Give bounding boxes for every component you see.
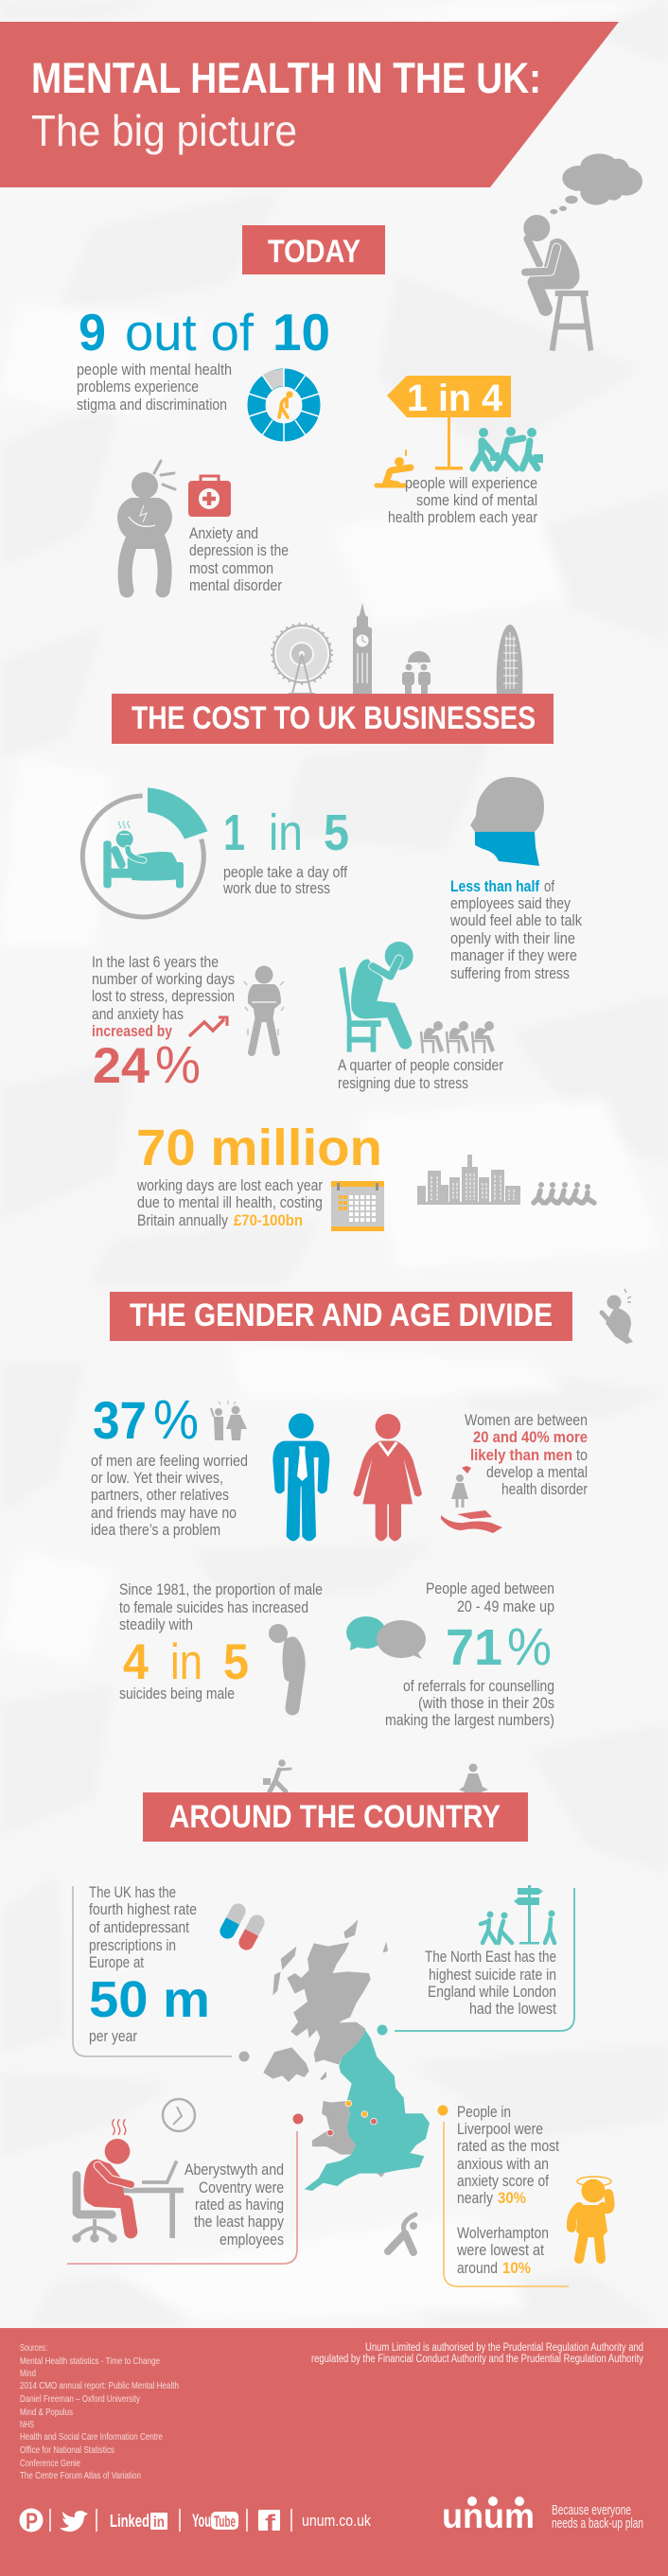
callout: least happy employees: the least happy [194, 2214, 285, 2231]
text: working days lost: and anxiety has [92, 1006, 184, 1023]
footer band [0, 2328, 668, 2576]
icon: linkedin: in [153, 2514, 165, 2531]
stat: 9 out of 10: 10 [272, 303, 330, 362]
map: england [305, 2030, 430, 2191]
stat: 1 in 5: 5 [324, 804, 349, 861]
icon: first aid kit [188, 476, 231, 517]
callout: antidepressants: The UK has the [89, 1884, 176, 1901]
callout: least happy employees: Coventry were [199, 2179, 284, 2197]
icon: facebook [258, 2510, 280, 2536]
heading: cost to uk businesses: THE COST TO UK BUSINESSES [132, 700, 536, 736]
text: less than half [449, 878, 583, 982]
heading: around the country [143, 1792, 528, 1842]
text: working days lost: lost to stress, depression [92, 988, 235, 1005]
callout: liverpool and wolverhampton [437, 2104, 569, 2286]
map: northern ireland and islands [263, 1919, 388, 2178]
callout: antidepressants: fourth highest rate [89, 1901, 197, 1918]
stat: 24% [93, 1034, 201, 1094]
stat: 24%: 24 [93, 1038, 150, 1094]
text: women more likely: develop a mental [486, 1464, 588, 1481]
icon: twitter [60, 2511, 88, 2532]
stat: 71%: 71 [446, 1619, 502, 1676]
callout: liverpool and wolverhampton: anxious with an [457, 2156, 549, 2173]
text: women more likely: likely than men [470, 1447, 572, 1464]
icon: speech bubbles [346, 1616, 426, 1659]
text: less than half: employees said they [450, 895, 571, 912]
heading: today: TODAY [268, 234, 360, 270]
icon: meditating person [459, 1764, 488, 1792]
icon: three small seated people [421, 1021, 495, 1053]
icon: stretching person [388, 2214, 417, 2252]
icon: clock [163, 2099, 195, 2131]
footer: social icons [19, 2508, 371, 2536]
icon: teal person with head in hands on chair [339, 942, 413, 1052]
callout: north east suicide rate: had the lowest [469, 2001, 556, 2018]
icon: walking person with briefcase [263, 1759, 290, 1791]
stat: 4 in 5 [119, 1634, 249, 1703]
callout: liverpool and wolverhampton: 10% [502, 2260, 531, 2277]
icon: dizzy person [571, 2177, 611, 2259]
icon: gherkin building [497, 625, 522, 695]
text: quarter consider resigning [338, 1057, 503, 1092]
heading: gender and age divide: THE GENDER AND AGE DIVIDE [130, 1297, 553, 1333]
footer: regulatory statement [311, 2342, 643, 2365]
chart: 1 in 5 ring with sick person in bed [82, 787, 207, 917]
text: women more likely: health disorder [501, 1481, 588, 1498]
callout: least happy employees: Aberystwyth and [185, 2161, 284, 2179]
stat: 37%: 37 [93, 1390, 147, 1450]
heading: cost to uk businesses [112, 694, 554, 744]
icon: crowd of runners [534, 1182, 594, 1203]
map: scotland [287, 1942, 371, 2065]
footer: tagline [552, 2502, 643, 2532]
callout: antidepressants: prescriptions in [89, 1937, 176, 1954]
text: day off work: people take a day off [223, 864, 347, 881]
stat: 71% [446, 1616, 552, 1676]
footer: sources list: Conference Genie [20, 2458, 80, 2469]
text: people aged 20-49 [426, 1580, 554, 1615]
footer: sources list: The Centre Forum Atlas of Variation [20, 2470, 141, 2481]
text: working days lost each year: Britain annually [137, 1212, 229, 1229]
footer: sources list: 2014 CMO annual report: Public Mental Health [20, 2380, 179, 2391]
title line 2: The big picture [31, 106, 297, 155]
icon: person in pain [117, 461, 175, 591]
text: women more likely: 20 and 40% more [473, 1429, 588, 1446]
footer: sources list: Health and Social Care Information Centre [20, 2431, 163, 2443]
text: quarter consider resigning: A quarter of people consider [338, 1057, 503, 1074]
footer: sources list [20, 2342, 179, 2481]
stat: 4 in 5: suicides being male [119, 1685, 235, 1703]
stat: 1 in 5 [223, 804, 349, 861]
callout: antidepressants: of antidepressant [89, 1919, 189, 1936]
text: men worried or low: of men are feeling worried [91, 1453, 248, 1470]
callout: liverpool and wolverhampton: anxiety score of [457, 2173, 549, 2190]
text: male suicides: steadily with [119, 1616, 193, 1633]
text: day off work: work due to stress [222, 880, 330, 897]
footer: sources list: Office for National Statistics [20, 2444, 114, 2456]
text: less than half: suffering from stress [450, 965, 570, 982]
map: wales [312, 2101, 356, 2155]
icon: city skyline [417, 1155, 520, 1205]
text: men worried or low [91, 1453, 248, 1539]
stat: 9 out of 10: out of [125, 303, 255, 362]
callout: least happy employees: rated as having [195, 2197, 284, 2214]
footer: sources list: Mental Health statistics - Time to Change [20, 2355, 160, 2367]
text: 1 in 4 explanation [388, 475, 537, 526]
footer: sources list: Mind & Populus [20, 2407, 73, 2418]
icon: pinterest: P [26, 2509, 38, 2534]
text: working days lost: number of working days [92, 971, 235, 988]
text: anxiety and depression [189, 525, 289, 594]
callout: north east suicide rate [377, 1888, 574, 2035]
text: people aged 20-49: 20 - 49 make up [457, 1598, 554, 1615]
stat: 37%: % [153, 1389, 199, 1451]
icon: rising arrow [189, 1017, 227, 1036]
callout: north east suicide rate: highest suicide rate in [429, 1967, 556, 1984]
icon: calendar [331, 1181, 384, 1231]
icon: linkedin: Linked [110, 2512, 149, 2531]
text: anxiety and depression: most common [189, 560, 273, 577]
callout: antidepressants [73, 1884, 250, 2061]
text: referrals for counselling [385, 1678, 554, 1729]
callout: least happy employees [67, 2114, 303, 2264]
stat: 70 million: 70 million [136, 1120, 382, 1176]
text: people aged 20-49: People aged between [426, 1580, 554, 1597]
callout: least happy employees: employees [220, 2232, 284, 2249]
text: anxiety and depression: Anxiety and [189, 525, 258, 542]
callout: liverpool and wolverhampton: rated as the most [457, 2138, 559, 2155]
footer: sources list: NHS [20, 2419, 34, 2430]
callout: liverpool and wolverhampton: Liverpool were [457, 2121, 543, 2138]
stat: 4 in 5: 4 [123, 1634, 149, 1690]
icon: signpost and people [481, 1885, 554, 1944]
footer: tagline: Because everyone [552, 2502, 631, 2518]
icon: shaking person [244, 965, 284, 1052]
icon: pills [218, 1901, 267, 1952]
text: referrals for counselling: of referrals for counselling [403, 1678, 554, 1695]
chart: 9 of 10 donut [249, 368, 319, 442]
icon: man and woman figures [272, 1413, 422, 1541]
callout: liverpool and wolverhampton: Wolverhampton [457, 2225, 549, 2242]
text: less than half: of [544, 878, 554, 895]
stat: 4 in 5: 5 [223, 1634, 249, 1690]
text: male suicides [119, 1581, 323, 1633]
text: male suicides: to female suicides has increased [119, 1599, 308, 1616]
footer: unum logo: unum [442, 2497, 535, 2535]
icon: thinking person on stool with thought cloud [523, 153, 642, 351]
text: working days lost each year: working days are lost each year [136, 1177, 323, 1194]
text: working days lost each year: due to mental ill health, costing [137, 1194, 323, 1211]
icon: kneeling upset person [602, 1289, 633, 1344]
text: referrals for counselling: making the largest numbers) [385, 1712, 554, 1729]
icon: youtube: You [192, 2512, 211, 2532]
text: less than half: manager if they were [450, 947, 577, 964]
text: working days lost: increased by [92, 1023, 173, 1040]
callout: liverpool and wolverhampton: around [457, 2260, 498, 2277]
footer: sources list: Sources: [20, 2342, 47, 2354]
icon: teal walking group [473, 427, 543, 468]
text: anxiety and depression: mental disorder [189, 577, 282, 594]
icon: arguing couple [211, 1401, 247, 1440]
stat: 4 in 5: in [170, 1634, 202, 1690]
text: working days lost: In the last 6 years the [92, 954, 219, 971]
icon: 1 in 4 signpost: 1 in 4 [407, 378, 503, 419]
callout: north east suicide rate: England while London [428, 1984, 556, 2001]
callout: liverpool and wolverhampton: People in [457, 2104, 511, 2121]
callout: north east suicide rate: The North East has the [425, 1949, 556, 1966]
icon: head profile [470, 777, 544, 866]
text: quarter consider resigning: resigning due to stress [338, 1075, 468, 1092]
text: women more likely [465, 1412, 588, 1498]
callout: liverpool and wolverhampton: nearly [457, 2190, 494, 2207]
website address: unum.co.uk [302, 2512, 371, 2530]
icon: couple under umbrella [402, 651, 431, 695]
icon: london eye [272, 624, 332, 694]
map: city markers [327, 2100, 377, 2136]
stat: 50 m: 50 m [89, 1971, 210, 2028]
text: stigma: problems experience [77, 379, 199, 396]
dividers [50, 2509, 291, 2532]
icon: 1 in 4 signpost [387, 376, 511, 469]
stat: 9 out of 10: 9 [79, 303, 106, 362]
footer: sources list: Daniel Freeman – Oxford University [20, 2393, 141, 2405]
text: women more likely: Women are between [465, 1412, 588, 1429]
text: less than half: openly with their line [450, 930, 575, 947]
text: 1 in 4 explanation: people will experience [405, 475, 537, 492]
text: working days lost each year [136, 1177, 323, 1229]
text: day off work [222, 864, 347, 897]
stat: 24%: % [155, 1034, 201, 1094]
text: less than half: Less than half [450, 878, 539, 895]
text: less than half: would feel able to talk [449, 912, 583, 929]
icon: pinterest [19, 2508, 44, 2534]
icon: youtube: Tube [214, 2513, 236, 2531]
title line 1: MENTAL HEALTH IN THE UK: [31, 54, 541, 102]
text: male suicides: Since 1981, the proportion of male [119, 1581, 323, 1598]
text: stigma: stigma and discrimination [77, 397, 227, 414]
stat: 1 in 5: in [269, 804, 303, 861]
icon: big ben [353, 603, 372, 695]
text: stigma [77, 362, 232, 414]
text: referrals for counselling: (with those in their 20s [418, 1695, 554, 1712]
stat: 71%: % [507, 1616, 552, 1676]
title banner [0, 22, 619, 187]
text: men worried or low: partners, other relatives [91, 1487, 229, 1504]
heading: gender and age divide [110, 1292, 572, 1341]
text: working days lost each year: £70-100bn [234, 1212, 303, 1229]
text: 1 in 4 explanation: some kind of mental [416, 492, 537, 509]
text: working days lost [92, 954, 235, 1040]
text: men worried or low: or low. Yet their wives, [91, 1470, 223, 1487]
footer: sources list: Mind [20, 2368, 36, 2379]
text: men worried or low: idea there’s a problem [91, 1522, 220, 1539]
text: men worried or low: and friends may have no [91, 1505, 237, 1522]
callout: liverpool and wolverhampton: 30% [498, 2190, 526, 2207]
heading: around the country: AROUND THE COUNTRY [169, 1799, 501, 1835]
icon: small woman over open hand [441, 1466, 502, 1533]
stat: 1 in 5: 1 [223, 804, 245, 861]
callout: liverpool and wolverhampton: were lowest at [456, 2242, 544, 2259]
text: women more likely: to [576, 1447, 588, 1464]
text: anxiety and depression: depression is the [189, 542, 289, 559]
icon: kneeling orange person [377, 450, 411, 485]
map: united kingdom [263, 1919, 430, 2191]
callout: antidepressants: Europe at [89, 1954, 144, 1971]
icon: stressed person at desk [72, 2119, 184, 2243]
callout: antidepressants: per year [89, 2028, 137, 2045]
icon: sad bowed person [269, 1624, 298, 1708]
icon: facebook: f [265, 2511, 276, 2536]
stat: 9 out of 10 [79, 303, 330, 362]
stat: 37% [93, 1389, 199, 1451]
heading: today [242, 225, 385, 274]
text: stigma: people with mental health [77, 362, 232, 379]
text: 1 in 4 explanation: health problem each year [388, 509, 537, 526]
